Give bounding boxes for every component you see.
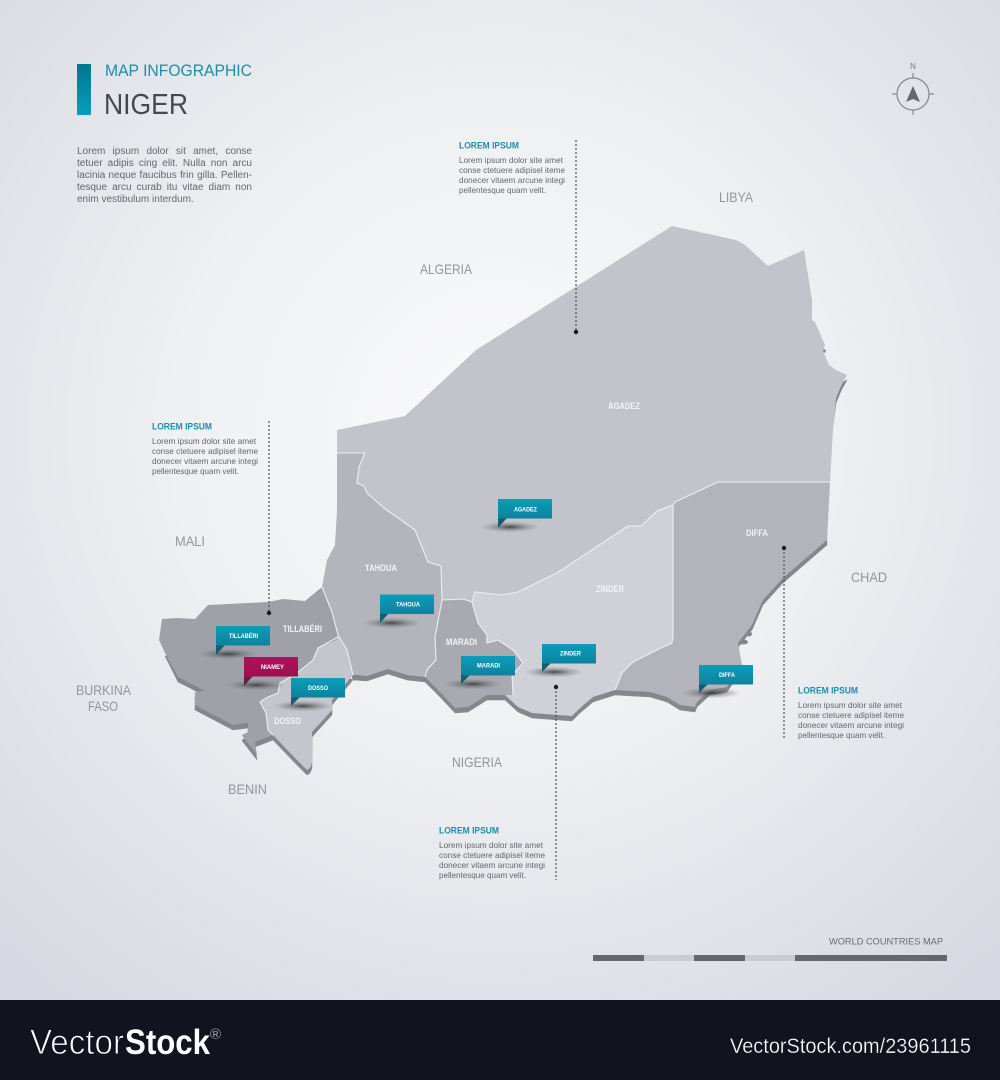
- title: NIGER: [104, 89, 188, 121]
- region: Dosso: [260, 635, 353, 770]
- intro paragraph: tesque arcu curab itu vitae diam non: [77, 182, 252, 193]
- region names: DOSSO: [274, 716, 301, 726]
- map extrusion: [165, 380, 847, 775]
- callout: south: donecer vitaem arcune integi: [439, 860, 545, 870]
- callout: east: pellentesque quam velit.: [798, 730, 885, 740]
- callout: north: LOREM IPSUM: [459, 140, 519, 152]
- callout: east: donecer vitaem arcune integi: [798, 720, 904, 730]
- region: Tillaberi: [159, 587, 338, 755]
- region: Zinder: [472, 505, 673, 716]
- VectorStock logo: Vector: [30, 1023, 124, 1062]
- country labels: CHAD: [851, 569, 887, 585]
- country labels: MALI: [175, 533, 205, 549]
- image id: VectorStock.com/23961115: [730, 1035, 971, 1058]
- intro paragraph: enim vestibulum interdum.: [77, 194, 194, 205]
- icon: compass: [892, 62, 934, 115]
- callout: east: conse ctetuere adipisel iteme: [798, 710, 904, 720]
- intro paragraph: tetuer adipis cing elit. Nulla non arcu: [77, 158, 252, 169]
- region borders: [260, 453, 830, 735]
- pin: Niamey: [226, 657, 298, 690]
- pin: Zinder: [524, 644, 596, 678]
- callout: east: Lorem ipsum dolor site amet: [798, 700, 903, 710]
- callout: west: conse ctetuere adipisel iteme: [152, 446, 258, 456]
- region names: TAHOUA: [365, 563, 397, 573]
- callout: south: Lorem ipsum dolor site amet: [439, 840, 544, 850]
- country labels: ALGERIA: [420, 261, 473, 277]
- pin: Tahoua: TAHOUA: [396, 602, 420, 608]
- lake Chad islands: [738, 349, 826, 644]
- country labels: FASO: [88, 698, 118, 714]
- callout: south: [439, 685, 558, 880]
- callout: north: Lorem ipsum dolor site amet: [459, 155, 564, 165]
- callout: west: pellentesque quam velit.: [152, 466, 239, 476]
- callout: north: donecer vitaem arcune integi: [459, 175, 565, 185]
- callout: north: conse ctetuere adipisel iteme: [459, 165, 565, 175]
- subtitle: MAP INFOGRAPHIC: [105, 62, 252, 80]
- map scale: WORLD COUNTRIES MAP: [829, 936, 943, 948]
- pin: Dosso: [273, 678, 345, 712]
- VectorStock logo: ®: [210, 1026, 221, 1043]
- region names: TILLABÉRI: [283, 624, 322, 634]
- pin: Tillaberi: [198, 626, 270, 660]
- pin: Dosso: DOSSO: [308, 685, 328, 692]
- pin: Maradi: [443, 656, 515, 690]
- country labels: NIGERIA: [452, 754, 503, 770]
- pin: Agadez: [480, 499, 552, 532]
- region: Diffa: [615, 482, 830, 707]
- region names: DIFFA: [746, 528, 768, 538]
- callout: south: pellentesque quam velit.: [439, 870, 526, 880]
- region names: ZINDER: [596, 584, 624, 594]
- country labels: LIBYA: [719, 189, 754, 205]
- callout: north: pellentesque quam velit.: [459, 185, 546, 195]
- icon: compass: N: [910, 62, 916, 71]
- region names: AGADEZ: [608, 401, 640, 411]
- region: Tahoua: [322, 453, 442, 677]
- title block: [77, 62, 252, 121]
- callout: west: LOREM IPSUM: [152, 422, 212, 432]
- callout: west: Lorem ipsum dolor site amet: [152, 436, 257, 446]
- pin: Maradi: MARADI: [477, 662, 500, 670]
- region: Maradi: [425, 599, 523, 708]
- pin: Tillaberi: TILLABÉRI: [229, 631, 258, 640]
- map of Niger: [159, 226, 847, 775]
- pin: Diffa: DIFFA: [719, 672, 735, 679]
- intro paragraph: [77, 146, 252, 205]
- pin: Tahoua: [362, 594, 434, 628]
- region: Agadez: [337, 226, 847, 602]
- title accent bar: [77, 64, 91, 115]
- country labels: [76, 189, 887, 797]
- callout: east: [782, 546, 904, 740]
- callout: east: LOREM IPSUM: [798, 686, 858, 696]
- map scale: [593, 936, 947, 961]
- pin: Agadez: AGADEZ: [514, 506, 537, 514]
- callout: north: [459, 140, 578, 334]
- callout: south: LOREM IPSUM: [439, 826, 499, 836]
- country labels: BENIN: [228, 781, 267, 797]
- region names: [274, 401, 768, 726]
- VectorStock logo: [30, 1023, 221, 1062]
- footer bar: [0, 1000, 1000, 1080]
- pin: Niamey: NIAMEY: [261, 664, 285, 671]
- callout: south: conse ctetuere adipisel iteme: [439, 850, 545, 860]
- pin: Zinder: ZINDER: [560, 650, 581, 658]
- VectorStock logo: Stock: [125, 1023, 210, 1062]
- callout: west: [152, 421, 271, 615]
- pin: Diffa: [681, 665, 753, 698]
- intro paragraph: lacinia neque faucibus frin gilla. Pellen-: [77, 170, 252, 181]
- country labels: BURKINA: [76, 682, 132, 698]
- region names: MARADI: [446, 637, 477, 647]
- callout: west: donecer vitaem arcune integi: [152, 456, 258, 466]
- intro paragraph: Lorem ipsum dolor sit amet, conse: [77, 146, 252, 157]
